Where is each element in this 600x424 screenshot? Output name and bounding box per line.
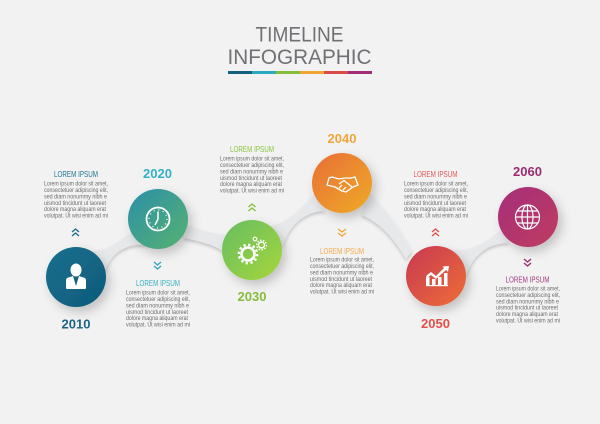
title rainbow underline: [228, 71, 372, 74]
step 2020: [126, 166, 190, 329]
text block 2050: sed diam nonummy nibh e: [404, 193, 467, 200]
text block 2010: dolore magna aliquam erat: [44, 206, 106, 213]
text block 2060: LOREM IPSUM: [506, 274, 550, 284]
year 2050: 2050: [421, 316, 450, 331]
chevrons 2020: [154, 262, 161, 269]
text block 2020: LOREM IPSUM: [136, 278, 180, 288]
circle 2030: [222, 220, 282, 280]
text block 2010: uismod tincidunt ut laoreet: [44, 200, 106, 207]
text block 2040: consectetuer adipiscing elit,: [310, 263, 374, 270]
title: TIMELINE: [256, 22, 344, 46]
year 2030: 2030: [238, 289, 266, 304]
text block 2060: volutpat. Ut wisi enim ad mi: [496, 318, 560, 324]
text block 2020: uismod tincidunt ut laoreet: [126, 309, 188, 316]
circle 2040: [312, 153, 372, 213]
text block 2050: dolore magna aliquam erat: [404, 206, 466, 213]
text block 2020: dolore magna aliquam erat: [126, 315, 188, 322]
text block 2040: LOREM IPSUM: [320, 246, 364, 256]
step 2060: [496, 164, 560, 324]
text block 2010: Lorem ipsum dolor sit amet,: [44, 180, 108, 188]
text block 2060: uismod tincidunt ut laoreet: [496, 305, 558, 312]
text block 2030: consectetuer adipiscing elit,: [220, 162, 284, 169]
text block 2040: uismod tincidunt ut laoreet: [310, 276, 372, 283]
text block 2040: volutpat. Ut wisi enim ad mi: [310, 289, 374, 296]
text block 2050: volutpat. Ut wisi enim ad mi: [404, 213, 468, 220]
step 2030: [220, 144, 284, 304]
icon: globe: [516, 205, 540, 229]
chevrons 2010: [72, 229, 79, 236]
icon: handshake: [327, 177, 358, 192]
text block 2020: [126, 278, 190, 329]
text block 2030: dolore magna aliquam erat: [220, 181, 282, 188]
text block 2010: volutpat. Ut wisi enim ad mi: [44, 213, 108, 220]
text block 2030: Lorem ipsum dolor sit amet,: [220, 156, 284, 162]
text block 2040: dolore magna aliquam erat: [310, 282, 372, 289]
chevrons 2050: [432, 229, 439, 236]
icon: growth chart: [426, 266, 449, 286]
title: [228, 22, 372, 69]
text block 2050: [404, 169, 468, 220]
step 2050: [404, 169, 468, 331]
text block 2040: sed diam nonummy nibh e: [310, 269, 373, 276]
chevrons 2040: [338, 229, 346, 236]
icon: clock: [146, 208, 170, 230]
text block 2010: sed diam nonummy nibh e: [44, 193, 107, 200]
text block 2060: consectetuer adipiscing elit,: [496, 292, 560, 299]
circle 2010: [46, 247, 106, 307]
year 2020: 2020: [143, 166, 172, 181]
year 2040: 2040: [328, 131, 356, 146]
text block 2010: [44, 169, 108, 220]
text block 2010: consectetuer adipiscing elit,: [44, 187, 108, 194]
text block 2020: Lorem ipsum dolor sit amet,: [126, 290, 190, 296]
icon: gears: [239, 237, 266, 263]
text block 2010: LOREM IPSUM: [54, 169, 98, 179]
text block 2020: volutpat. Ut wisi enim ad mi: [126, 322, 190, 329]
chevrons 2030: [248, 204, 256, 211]
icon: businessman: [66, 264, 86, 289]
text block 2020: consectetuer adipiscing elit,: [126, 296, 190, 303]
text block 2050: Lorem ipsum dolor sit amet,: [404, 180, 468, 188]
text block 2060: sed diam nonummy nibh e: [496, 298, 559, 305]
text block 2060: dolore magna aliquam erat: [496, 311, 558, 318]
text block 2060: [496, 274, 560, 324]
text block 2030: volutpat. Ut wisi enim ad mi: [220, 188, 284, 195]
text block 2040: [310, 246, 374, 296]
text block 2030: sed diam nonummy nibh e: [220, 168, 283, 175]
text block 2040: Lorem ipsum dolor sit amet,: [310, 256, 374, 264]
title: INFOGRAPHIC: [228, 45, 372, 69]
step 2010: [44, 169, 108, 332]
text block 2050: LOREM IPSUM: [414, 169, 458, 179]
text block 2050: uismod tincidunt ut laoreet: [404, 200, 466, 207]
year 2010: 2010: [62, 316, 90, 332]
text block 2020: sed diam nonummy nibh e: [126, 302, 189, 309]
text block 2060: Lorem ipsum dolor sit amet,: [496, 286, 560, 292]
text block 2030: [220, 144, 284, 195]
text block 2030: uismod tincidunt ut laoreet: [220, 175, 282, 182]
text block 2030: LOREM IPSUM: [230, 144, 274, 154]
year 2060: 2060: [513, 164, 542, 179]
connecting ribbon: [90, 192, 510, 276]
circle 2060: [498, 187, 558, 247]
step 2040: [310, 131, 374, 296]
circle 2050: [406, 246, 466, 306]
chevrons 2060: [524, 259, 531, 266]
circle 2020: [128, 189, 188, 249]
text block 2050: consectetuer adipiscing elit,: [404, 187, 468, 194]
